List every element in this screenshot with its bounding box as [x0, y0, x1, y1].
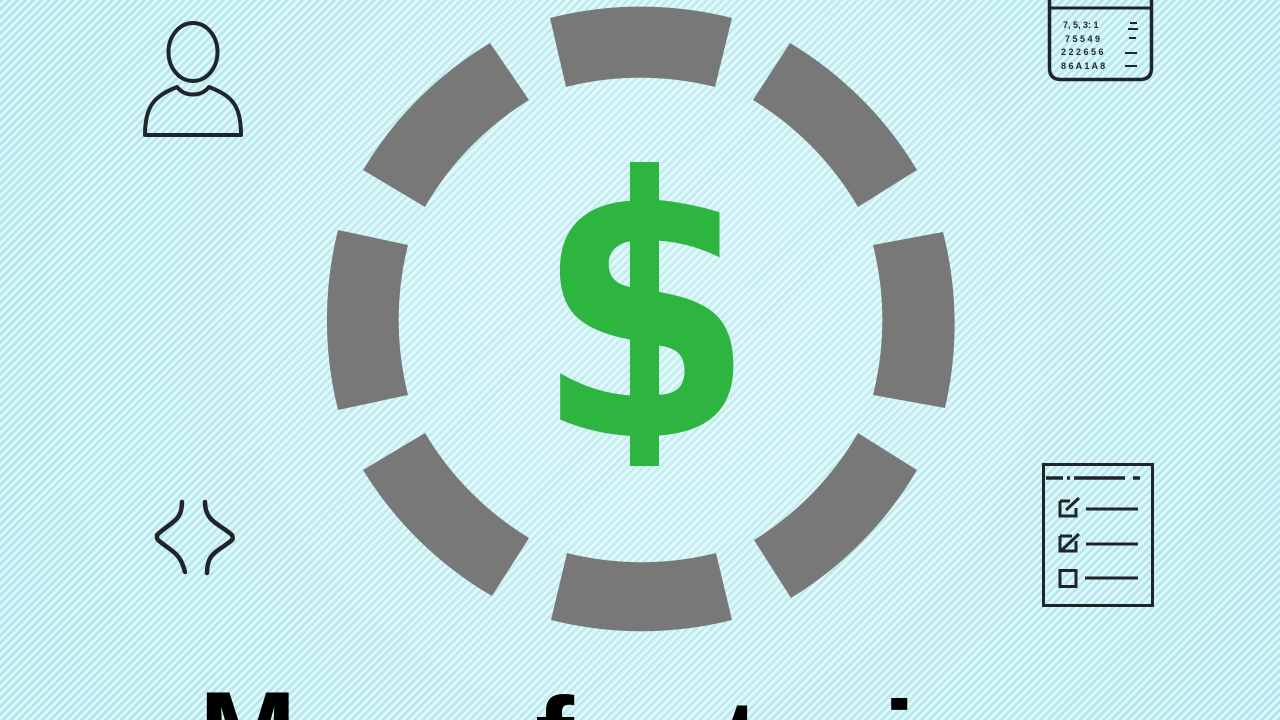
calendar date marks: 2 2 2 6 5 6	[1061, 47, 1104, 57]
calendar date marks: 7, 5, 3: 1	[1063, 20, 1099, 30]
icon: user	[145, 23, 241, 135]
calendar date marks: 8 6 A 1 A 8	[1061, 61, 1105, 71]
calendar date marks	[1061, 20, 1105, 71]
icon: code brackets	[157, 502, 233, 573]
icon: checklist	[1044, 464, 1152, 606]
dollar sign	[560, 162, 734, 466]
segmented ring	[327, 7, 955, 631]
icon: calendar	[1049, 0, 1152, 80]
dollar sign: $	[535, 99, 755, 523]
calendar date marks: 7 5 5 4 9	[1065, 34, 1100, 44]
